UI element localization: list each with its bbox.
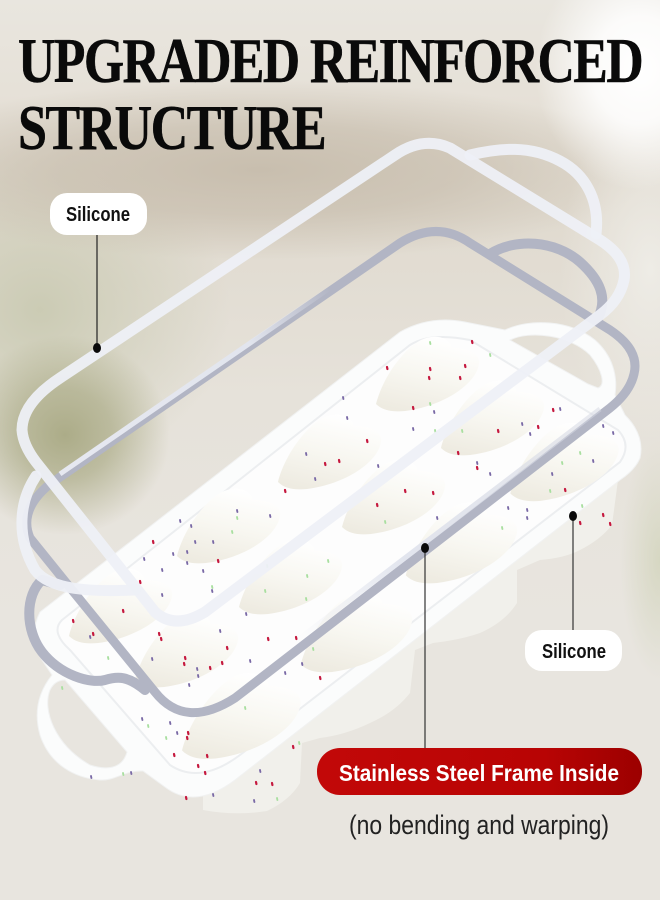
tray inner rim xyxy=(58,337,626,773)
silicone tray body xyxy=(34,320,641,797)
heart cavities: twelve moulds xyxy=(69,337,619,759)
callout: silicone upper ring xyxy=(50,193,147,353)
callout: silicone upper ring: Silicone xyxy=(66,204,130,226)
callout: silicone tray xyxy=(525,511,622,671)
callout: stainless steel frame: Stainless Steel Frame Inside xyxy=(339,760,619,786)
upper silicone ring xyxy=(22,143,625,621)
colourful speckles xyxy=(62,341,613,802)
tray cups underside xyxy=(203,480,618,813)
stainless steel frame ring xyxy=(27,232,635,713)
title xyxy=(18,26,642,163)
note text: (no bending and warping) xyxy=(349,810,609,840)
steel highlights on long edges xyxy=(60,288,600,638)
title: STRUCTURE xyxy=(18,93,325,163)
callout: stainless steel frame xyxy=(317,543,642,795)
callout: silicone tray: Silicone xyxy=(542,641,606,663)
